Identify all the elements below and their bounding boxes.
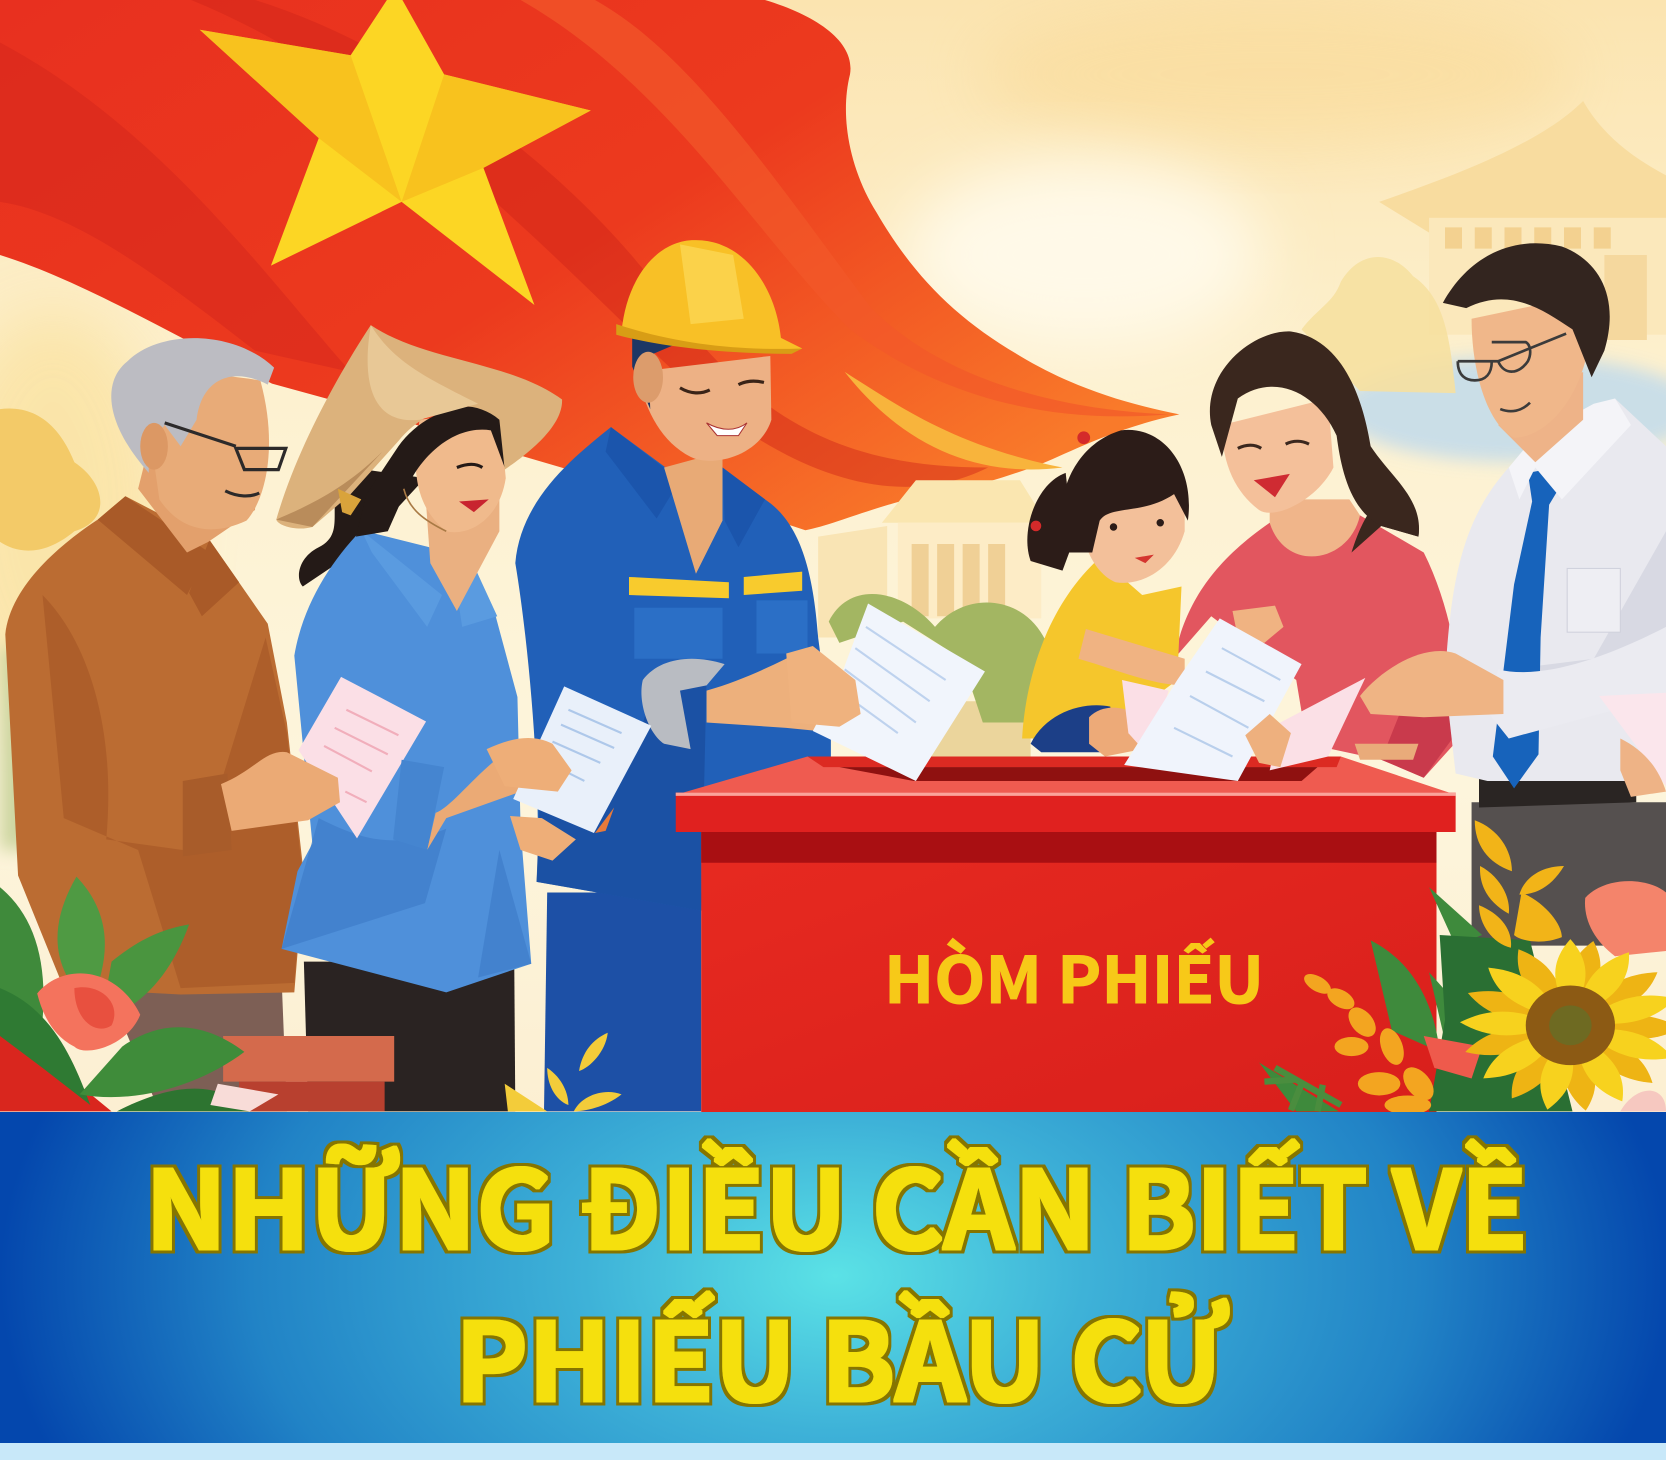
background sky: [0, 0, 1666, 1116]
ballot: white held by woman: [513, 686, 651, 833]
title text: [145, 1125, 1528, 1433]
person: young girl: [1022, 430, 1284, 756]
sunflower: [1459, 939, 1666, 1112]
flag star: [200, 0, 591, 305]
title text: PHIẾU BẦU CỬ: [455, 1277, 1229, 1433]
background trees: [0, 257, 1456, 551]
hands: woman: [487, 738, 576, 861]
small brick box left: [223, 1036, 394, 1111]
title banner: [0, 1112, 1666, 1460]
ballot: pink held by elderly man: [299, 677, 426, 838]
background pagoda right: [1379, 101, 1666, 340]
person: construction worker: [515, 240, 839, 1111]
arm: woman: [393, 749, 521, 850]
illustration: voters at the ballot box: [0, 0, 1666, 1116]
yellow sprig bottom: [505, 1033, 622, 1111]
flowers left: [0, 877, 278, 1111]
person: mother: [1174, 331, 1464, 778]
hand: elderly man: [221, 752, 340, 831]
ballot box: [676, 756, 1456, 1116]
ballots entering the slot: [786, 604, 1503, 781]
person: woman in conical hat: [276, 325, 562, 1111]
person: elderly man: [5, 338, 304, 1111]
red flag: [0, 0, 1179, 530]
title text: NHỮNG ĐIỀU CẦN BIẾT VỀ: [145, 1125, 1528, 1281]
flowers right: [1259, 820, 1666, 1115]
person: man with tie: [1443, 243, 1666, 946]
ballot box label: HÒM PHIẾU: [884, 930, 1264, 1022]
background temple centre: [818, 480, 1047, 760]
